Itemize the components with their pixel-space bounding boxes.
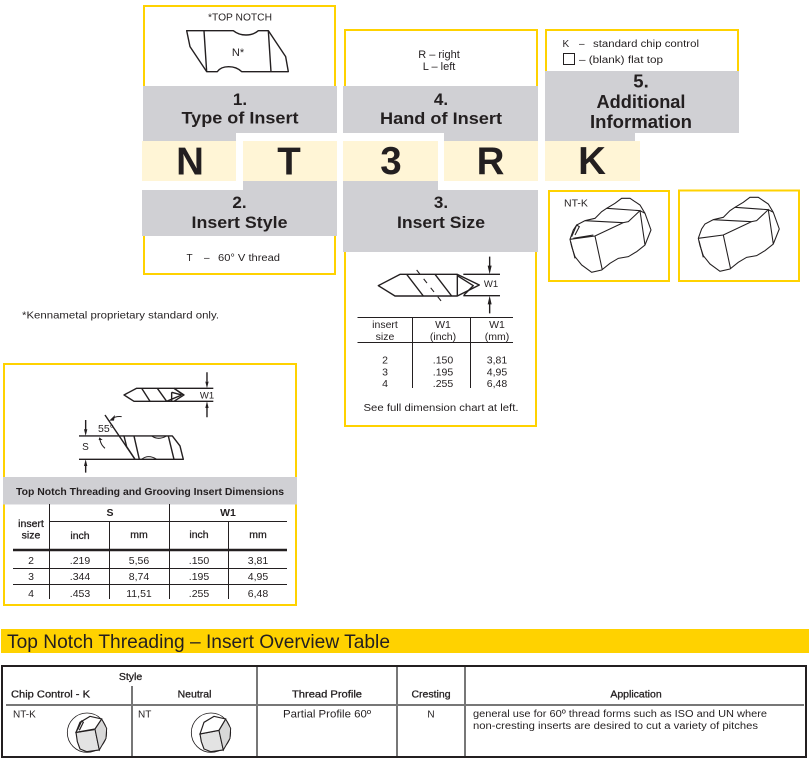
yellow frame [345,30,537,90]
table: insert size W1: 2 [382,354,388,366]
heading: 1 type of insert [182,90,299,128]
panel: NT-K insert drawing [549,191,669,281]
heading: 2 insert style: Insert Style [192,213,288,232]
code letter: T [243,140,337,184]
table: insert size W1: (inch) [430,331,456,343]
table: dimensions: 3 [28,571,34,583]
label: top notch: *TOP NOTCH [208,12,272,24]
cell: cresting: N [427,710,435,720]
code letter: N: N [176,140,204,184]
diagram: insert width W1: W1 [484,279,498,290]
code letter: 3 [343,140,438,183]
column headers: Chip Control - K [11,688,90,700]
code letter: K [545,140,640,183]
table: dimensions: 4,95 [248,571,268,583]
heading: 1 type of insert: Type of Insert [182,108,299,128]
yellow frame [144,230,335,274]
table: insert overview [2,666,806,758]
code letter: R [444,140,538,183]
table: dimensions: 4 [28,588,34,600]
text: right or left [418,49,460,73]
column headers: Cresting [411,688,451,700]
table: dimensions: .219 [70,555,90,567]
text: standard chip control: K [562,39,570,50]
icon: N insert outline [187,31,288,72]
cell: thread profile: Partial Profile 60º [283,708,371,720]
heading band: dimensions table [3,477,297,504]
icon: neutral insert [698,197,779,271]
heading: 3 insert size [397,193,485,232]
heading band: type of insert [143,86,337,141]
table: dimensions: W1 [220,507,236,519]
heading band: additional information [545,71,739,141]
heading: 1 type of insert: 1. [233,90,247,109]
code letter: 3: 3 [380,140,402,183]
table: dimensions: .344 [70,571,90,583]
label: N star: N* [232,47,245,59]
table: dimensions: .255 [189,588,209,600]
yellow frame [4,364,296,605]
table: dimensions: 3,81 [248,555,268,567]
panel: insert dimensions [3,364,297,605]
code letter: K: K [578,140,606,183]
heading: 5 additional information [590,70,692,132]
panel: 2 insert style [142,181,337,274]
table: insert size W1: 4,95 [487,366,507,378]
table: insert size W1: .255 [433,378,453,390]
heading: 5 additional information: 5. [633,70,649,92]
table: insert size W1 [358,317,513,390]
table: dimensions: insert [18,518,44,530]
table: insert size W1: .195 [433,366,453,378]
heading band: dimensions table: Top Notch Threading and Grooving Insert Dimensions [16,486,284,498]
code letter: T: T [277,140,301,184]
heading: 5 additional information: Information [590,111,692,132]
diagram: insert W1 width: W1 [200,390,214,402]
table: dimensions: 8,74 [129,571,149,583]
heading band: hand of insert [343,86,538,141]
heading band: insert size [343,181,538,252]
table: dimensions: 11,51 [126,588,152,600]
column headers: Thread Profile [292,688,362,700]
table: insert size W1: W1 [489,319,505,331]
table: dimensions: size [22,530,40,542]
table: dimensions: .195 [189,571,209,583]
table: dimensions: inch [189,529,209,541]
column headers: Style [119,671,142,683]
icon: NT-K insert circle [67,713,107,752]
table: dimensions: .453 [70,588,90,600]
note: see full dimension chart: See full dimension chart at left. [364,403,518,414]
label: NT-K: NT-K [564,198,588,210]
heading: 4 hand of insert: 4. [434,90,448,109]
column headers: Neutral [178,688,211,700]
text: standard chip control [562,39,699,50]
diagram: insert width W1 [378,257,500,313]
yellow frame [345,245,536,426]
title bar: insert overview table: Top Notch Threading – Insert Overview Table [7,631,390,653]
text: standard chip control: – [579,39,585,50]
table: dimensions: inch [70,530,90,542]
text: standard chip control: standard chip control [593,39,699,50]
diagram: insert S height with 55 degree angle: S [82,442,89,453]
text: T 60 degree V thread: 60° V thread [218,253,280,264]
column headers [11,671,662,700]
table: insert size W1: size [376,331,394,343]
panel: 5 additional information [545,30,739,141]
diagram: insert S height with 55 degree angle: 55° [98,423,114,435]
diagram: insert W1 width [124,372,214,417]
heading: 5 additional information: Additional [596,91,686,112]
grid lines [2,666,806,758]
text: T 60 degree V thread: – [204,253,210,264]
text: right or left: R – right [418,49,460,61]
panel: neutral insert drawing [679,190,799,281]
text: T 60 degree V thread [186,253,280,264]
cell: NT: NT [138,710,151,720]
heading: 2 insert style: 2. [232,193,247,212]
table: dimensions: S [106,507,114,519]
icon: NT-K insert [570,198,651,272]
heading: 3 insert size: Insert Size [397,213,485,232]
panel: 3 insert size [343,181,538,426]
yellow frame [546,30,738,75]
table: dimensions: mm [249,529,267,541]
table: insert size W1: (mm) [485,331,509,343]
table: insert size W1: W1 [435,319,451,331]
heading: 3 insert size: 3. [434,193,448,212]
table: dimensions: mm [130,529,148,541]
footnote: *Kennametal proprietary standard only. [22,310,219,322]
text: right or left: L – left [423,61,455,73]
table: dimensions: 2 [28,555,34,567]
text: T 60 degree V thread: T [186,253,193,264]
diagram: insert S height with 55 degree angle [79,415,183,473]
title bar: insert overview table [1,629,809,653]
icon: blank square [564,54,574,64]
cell: NT-K: NT-K [13,710,36,720]
table: dimensions: 6,48 [248,588,268,600]
table: insert size W1: 6,48 [487,378,507,390]
table: dimensions [13,504,287,600]
table: insert size W1: 3 [382,366,388,378]
table: insert size W1: 3,81 [487,354,507,366]
heading: 4 hand of insert: Hand of Insert [380,109,502,128]
table: insert size W1: .150 [433,354,453,366]
heading: 2 insert style [192,193,288,232]
code letter: N [142,140,236,184]
column headers: Application [610,688,662,700]
yellow frame [144,6,335,90]
table: insert size W1: 4 [382,378,388,390]
code letter: R: R [477,140,505,183]
cell: application [473,709,767,732]
cell: application: general use for 60º thread forms such as ISO and UN where [473,709,767,720]
table: dimensions: .150 [189,555,209,567]
table: insert size W1: insert [372,319,398,331]
panel: 1 type of insert [143,6,337,141]
panel: 4 hand of insert [343,30,538,141]
text: blank flat top: – (blank) flat top [579,55,663,66]
icon: NT insert circle [191,713,231,752]
heading band: insert style [142,181,337,236]
cell: application: non-cresting inserts are desired to cut a variety of pitches [473,721,758,732]
heading: 4 hand of insert [380,90,502,128]
table: dimensions: 5,56 [129,555,149,567]
